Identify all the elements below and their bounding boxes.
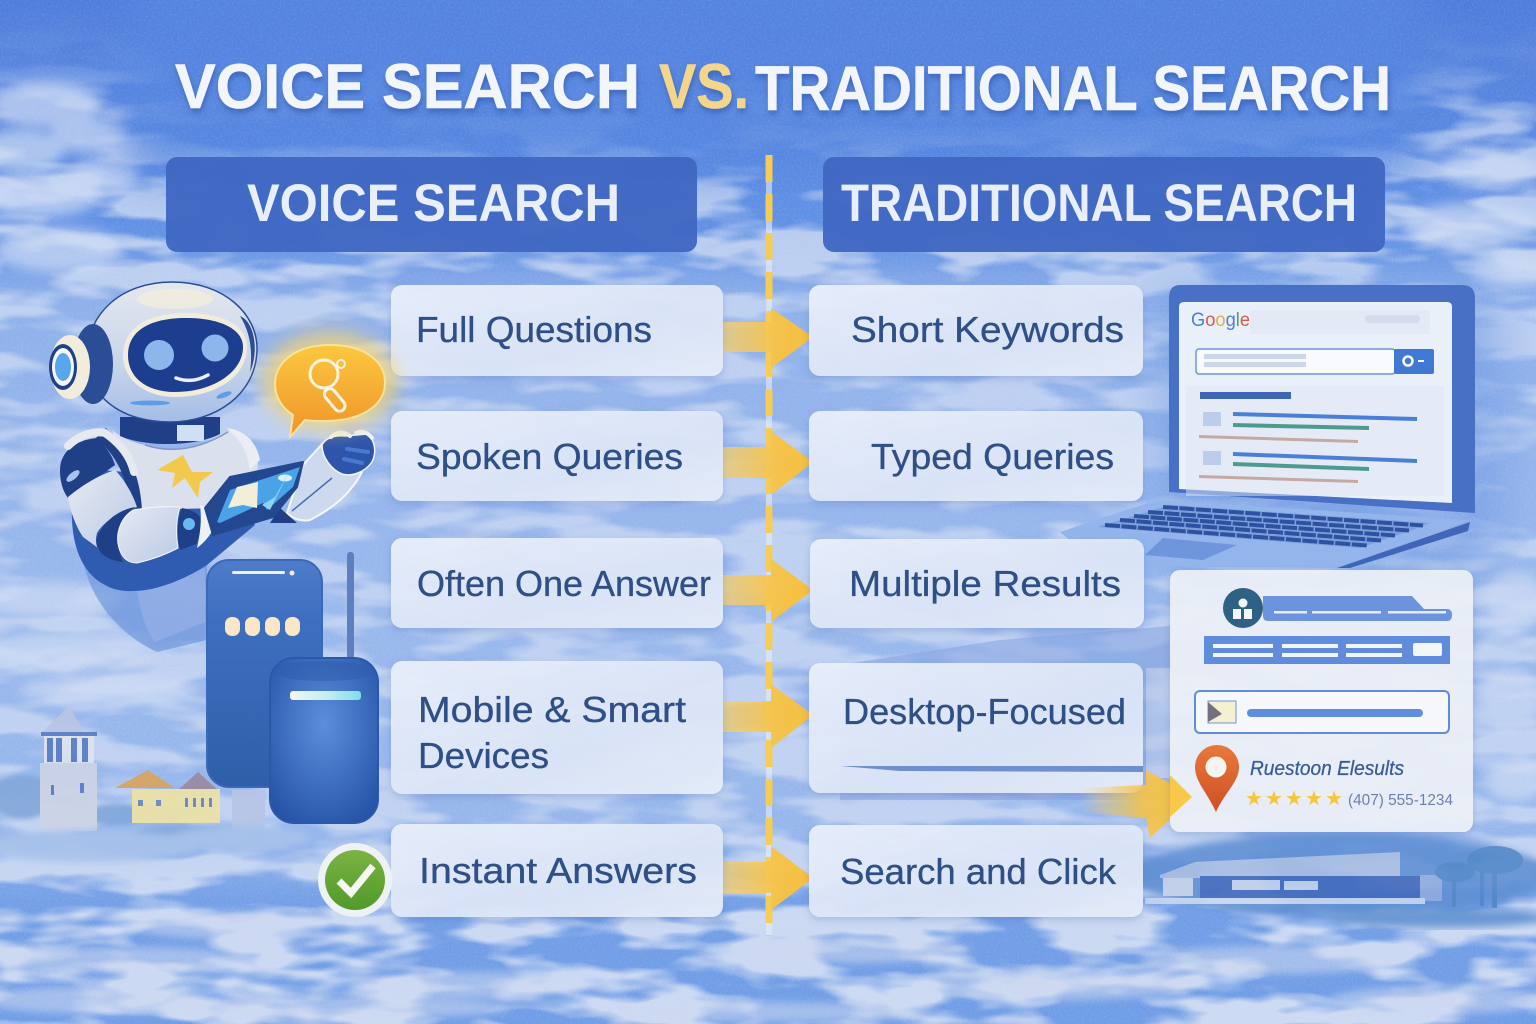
profile icon bbox=[1223, 588, 1263, 628]
card: mobile and smart devices: Mobile & Smart bbox=[418, 689, 686, 730]
header: voice search bbox=[166, 157, 697, 252]
robot visor bbox=[123, 313, 247, 397]
card: full questions: Full Questions bbox=[416, 309, 652, 350]
profile bar bbox=[1263, 596, 1452, 621]
card: typed queries: Typed Queries bbox=[871, 436, 1114, 477]
laptop screen bbox=[1179, 302, 1452, 503]
puffy side clouds bbox=[0, 83, 1536, 802]
laptop with search results bbox=[1060, 285, 1475, 568]
arrow: row 5 bbox=[722, 846, 813, 910]
bottom cloud bands bbox=[0, 911, 1536, 1022]
title bbox=[175, 52, 1391, 124]
card: desktop-focused: Desktop-Focused bbox=[843, 691, 1126, 732]
laptop lid bbox=[1169, 285, 1475, 513]
card: search and click bbox=[809, 825, 1143, 917]
right column cards bbox=[809, 285, 1144, 917]
robot neck bbox=[120, 417, 220, 444]
centre dashed divider bbox=[766, 155, 772, 936]
menu bar bbox=[1204, 636, 1450, 664]
card: instant answers bbox=[391, 824, 723, 917]
card: spoken queries: Spoken Queries bbox=[416, 436, 683, 477]
left column cards bbox=[391, 285, 723, 917]
map pin bbox=[1195, 745, 1239, 812]
phone dots bbox=[225, 617, 300, 636]
search box bbox=[1196, 349, 1395, 374]
phone number: (407) 555-1234 bbox=[1348, 792, 1453, 809]
smart speaker bbox=[270, 552, 378, 823]
card: typed queries bbox=[809, 411, 1143, 501]
robot head bbox=[87, 282, 257, 422]
search button bbox=[1394, 349, 1434, 374]
rating stars: ★★★★★ bbox=[1245, 786, 1343, 810]
landscape: faint columned building behind cards bbox=[840, 626, 1170, 800]
speech bubble with search icon bbox=[262, 331, 398, 437]
title: traditional search: TRADITIONAL SEARCH bbox=[755, 54, 1391, 124]
card: mobile and smart devices: Devices bbox=[418, 735, 549, 776]
robot bbox=[49, 282, 375, 652]
arrow head overlap bbox=[1170, 775, 1192, 817]
header: voice search: VOICE SEARCH bbox=[247, 174, 620, 233]
robot right ear bbox=[240, 316, 255, 372]
robot headphones bbox=[49, 324, 113, 404]
laptop base bbox=[1060, 500, 1470, 568]
local result card bbox=[1170, 570, 1473, 832]
card: often one answer: Often One Answer bbox=[417, 563, 711, 604]
business name: Ruestoon Elesults bbox=[1250, 758, 1404, 780]
card: mobile and smart devices bbox=[391, 661, 723, 794]
landscape: building and palms, right bbox=[1130, 833, 1536, 928]
deep-blue tint behind title bbox=[130, 0, 1420, 170]
result list bbox=[1186, 386, 1444, 496]
smartphone bbox=[207, 560, 322, 787]
card: short keywords bbox=[809, 285, 1143, 376]
header: traditional search: TRADITIONAL SEARCH bbox=[841, 174, 1357, 233]
search field bbox=[1195, 691, 1449, 733]
blue tint behind laptop bbox=[1160, 290, 1500, 570]
keyboard bbox=[1097, 505, 1430, 548]
landscape: tower and buildings, left bbox=[0, 706, 310, 862]
long arrow to local result card bbox=[1080, 770, 1194, 838]
card: full questions bbox=[391, 285, 723, 376]
robot lower body bbox=[72, 470, 255, 652]
arrow: row 1 bbox=[722, 308, 813, 368]
card: desktop-focused bbox=[809, 663, 1143, 793]
pale haze across the middle bbox=[0, 270, 1536, 870]
title: voice search: VOICE SEARCH bbox=[175, 52, 640, 122]
header: traditional search bbox=[823, 157, 1385, 252]
arrow: row 2 bbox=[722, 431, 813, 495]
robot right arm bbox=[270, 432, 375, 523]
card: multiple results: Multiple Results bbox=[849, 563, 1121, 604]
robot tablet bbox=[205, 462, 303, 535]
card: spoken queries bbox=[391, 411, 723, 501]
title: vs: VS. bbox=[659, 52, 749, 122]
google logo: Google bbox=[1191, 310, 1250, 331]
card: multiple results bbox=[810, 539, 1144, 628]
robot torso bbox=[112, 430, 258, 510]
arrow: row 3 bbox=[722, 559, 813, 622]
card: search and click: Search and Click bbox=[840, 851, 1117, 892]
card: instant answers: Instant Answers bbox=[419, 850, 697, 891]
green check badge bbox=[318, 843, 392, 917]
card: often one answer bbox=[391, 538, 723, 628]
arrow: row 4 bbox=[722, 684, 813, 748]
robot left shoulder and arm bbox=[60, 432, 215, 563]
robot star bbox=[157, 455, 213, 498]
card: short keywords: Short Keywords bbox=[851, 309, 1124, 350]
